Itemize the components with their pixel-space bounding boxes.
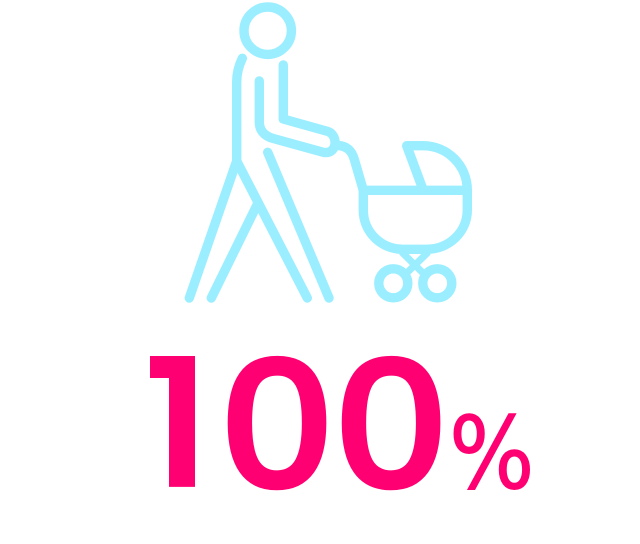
icon: pram handle (338, 146, 363, 190)
icon: front leg (237, 161, 307, 298)
icon: head (244, 7, 291, 54)
infographic canvas (150, 2, 530, 490)
icon: second front leg (268, 152, 329, 298)
digits 00: 0 (224, 323, 330, 524)
icon: person pushing a pram (189, 7, 467, 298)
icon: arm (259, 65, 335, 153)
icon: right wheel (423, 269, 452, 298)
digit 1: 1 (122, 311, 230, 529)
digit 1 flag (150, 356, 195, 378)
icon: back (237, 58, 242, 161)
icon: left wheel (379, 269, 408, 298)
icon: pram hood (407, 146, 467, 190)
icon: rear leg (189, 161, 237, 298)
icon: pram leg cross (402, 252, 428, 273)
percent sign: % (449, 397, 535, 512)
digits 00: 0 (338, 323, 444, 524)
icon: second rear leg (211, 205, 257, 298)
icon: pram basket (363, 190, 467, 249)
statistic: 100% (150, 356, 530, 490)
